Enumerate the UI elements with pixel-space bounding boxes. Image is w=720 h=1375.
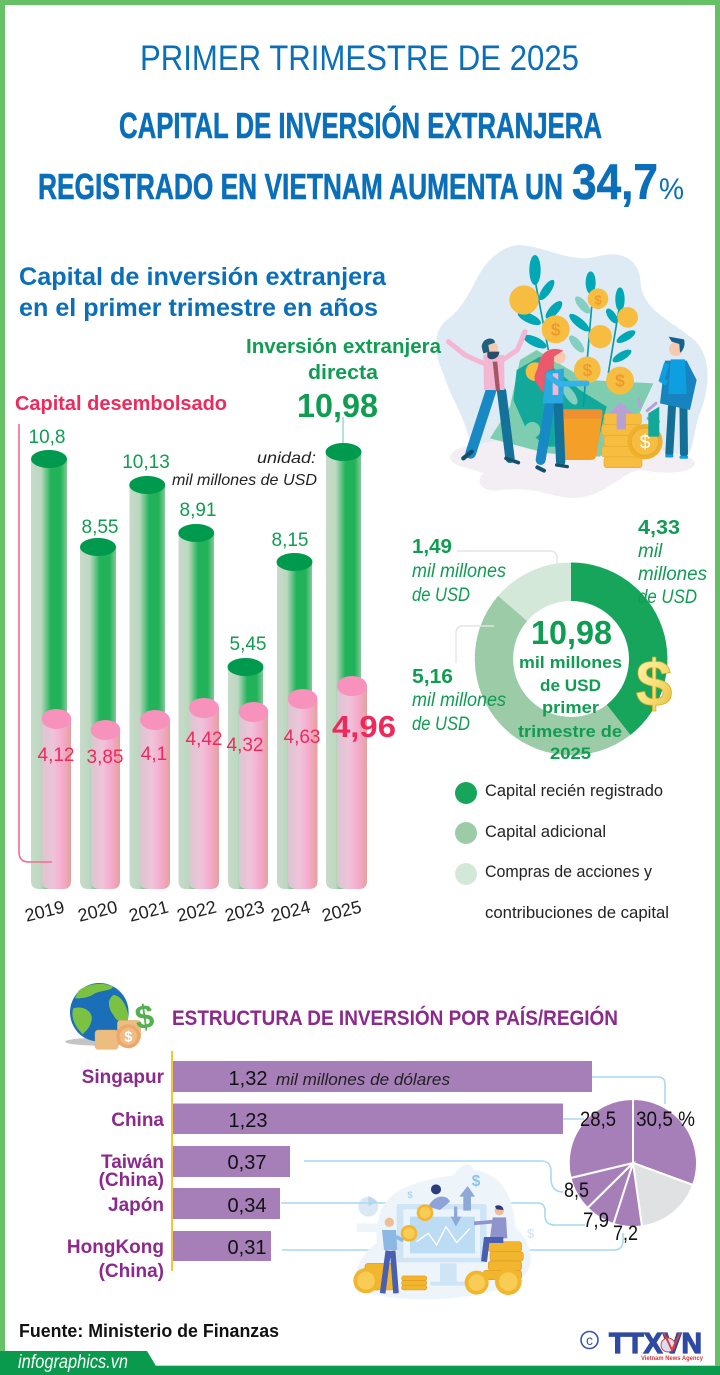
bar chart: capital by year (19, 417, 396, 926)
pie labels (564, 1108, 695, 1245)
illustration: people with money plants: $ (594, 293, 602, 308)
pie labels: 8,5 (564, 1179, 589, 1202)
illustration: investors around monitor: $ (472, 1173, 481, 1190)
donut segment: share purchases (498, 562, 571, 621)
section heading: capital by year (19, 263, 387, 322)
donut center label (518, 614, 622, 763)
pot (563, 409, 603, 460)
bar: Japan: 0,34 (228, 1195, 266, 1217)
donut center label: 2025 (550, 744, 591, 763)
green value labels: 8,15 (272, 530, 308, 551)
icon: gold dollar: $ (636, 646, 672, 720)
bar: Singapore (173, 1061, 592, 1092)
year axis labels: 2022 (175, 897, 218, 926)
illustration: people with money plants: $ (615, 371, 625, 391)
legend: Capital recién registrado (485, 781, 663, 800)
year axis labels: 2020 (76, 897, 119, 926)
title: percent sign: % (659, 173, 684, 206)
callout: 5,16: de USD (412, 714, 470, 735)
logo: TTXVN: Vietnam News Agency (641, 1355, 703, 1362)
man right (667, 395, 687, 457)
label: foreign direct investment: Inversión extranjera (246, 336, 442, 358)
footer site name: infographics.vn (18, 1352, 128, 1373)
donut center label: 10,98 (531, 614, 612, 651)
country labels: (China) (99, 1261, 164, 1282)
donut center label: de USD (540, 676, 601, 695)
bar: Hong Kong: 0,31 (228, 1237, 266, 1259)
bracket line: disbursed capital (19, 424, 52, 862)
callout: 5,16: mil millones (412, 690, 506, 711)
year axis labels: 2023 (223, 897, 266, 926)
green value labels: 10,13 (122, 452, 170, 473)
callout: 1,49 (412, 536, 506, 606)
callout: 5,16: 5,16 (412, 666, 453, 688)
pink cylinders: disbursed capital (42, 676, 367, 889)
donut segment: newly registered (571, 562, 667, 735)
green cylinders: foreign direct investment (31, 443, 362, 889)
icon: globe with coins: $ (124, 1030, 132, 1046)
unit note: mil millones de USD (172, 472, 317, 489)
chart gadget behind leader lines (357, 1196, 383, 1232)
green value labels: 5,45 (230, 634, 266, 655)
country labels: (China) (99, 1170, 164, 1191)
year axis labels: 2021 (127, 897, 170, 926)
unit note: unidad: (257, 450, 316, 467)
callout: 4,33: de USD (638, 587, 697, 608)
logo: TTXVN: TTXVN (609, 1328, 702, 1360)
pie labels: 7,9 (583, 1209, 609, 1232)
source: Fuente: Ministerio de Finanzas (19, 1321, 279, 1341)
man left (448, 332, 525, 463)
illustration: investors around monitor: $ (407, 1190, 413, 1200)
title: percentage: 34,7 (572, 154, 658, 210)
coin stack (602, 413, 642, 468)
illustration: people with money plants: $ (582, 360, 592, 380)
donut center label: mil millones (519, 653, 622, 672)
pie labels: 28,5 (580, 1108, 616, 1131)
country labels: Japón (108, 1195, 164, 1216)
unit note (172, 450, 317, 489)
pink value labels (38, 709, 396, 768)
pie labels: 7,2 (613, 1222, 638, 1245)
footer band (0, 1351, 720, 1375)
green value labels: 8,91 (180, 500, 216, 521)
man standing (385, 1218, 394, 1227)
legend: contribuciones de capital (485, 903, 669, 922)
donut center label: trimestre de (518, 722, 622, 741)
title block (38, 39, 684, 210)
bar: Japan (173, 1188, 280, 1219)
pie labels: 30,5 % (636, 1108, 695, 1131)
pink value labels: 3,85 (87, 747, 123, 768)
bar: Singapore: mil millones de dólares (276, 1070, 451, 1089)
country labels: Singapur (82, 1067, 165, 1088)
callout: 1,49: de USD (412, 585, 470, 606)
bar: Taiwan (173, 1146, 290, 1177)
title: period: PRIMER TRIMESTRE DE 2025 (140, 39, 579, 78)
section heading: capital by year: en el primer trimestre en años (19, 294, 378, 322)
country labels: Taiwán (101, 1152, 164, 1173)
legend: Compras de acciones y (485, 862, 652, 881)
callout: 4,33: 4,33 (638, 517, 680, 539)
pink value labels: 4,63 (284, 727, 320, 748)
year axis labels: 2024 (269, 897, 312, 926)
callout: 4,33 (638, 517, 707, 608)
label: foreign direct investment: directa (308, 362, 379, 384)
donut center label: primer (542, 698, 599, 717)
pie chart: share by country (564, 1099, 697, 1245)
pink value labels: 4,1 (141, 744, 167, 765)
illustration: people with money plants (436, 245, 708, 498)
icon: globe with coins: $ (133, 998, 157, 1037)
bar: Taiwan: 0,37 (228, 1152, 266, 1174)
bar: Singapore: 1,32 (229, 1068, 267, 1090)
illustration: investors around monitor (353, 1164, 535, 1299)
year axis labels: 2025 (320, 897, 363, 926)
section heading: capital by year: Capital de inversión extranjera (19, 263, 387, 291)
country labels: China (111, 1110, 164, 1131)
country labels: HongKong (67, 1237, 164, 1258)
year axis labels (23, 897, 363, 926)
illustration: people with money plants: $ (551, 319, 561, 339)
donut segment: additional capital (475, 596, 630, 755)
bar: Hong Kong (173, 1231, 271, 1261)
horizontal bar chart: investment by country (67, 1051, 592, 1282)
legend: Capital adicional (485, 822, 606, 841)
woman (537, 403, 567, 471)
callout: 4,33: millones (638, 564, 707, 585)
icon: globe with coins (65, 983, 157, 1049)
logo: TTXVN: c (586, 1332, 593, 1348)
year axis labels: 2019 (23, 897, 66, 926)
leader lines to pie (281, 1077, 665, 1250)
pink value labels: 4,96 (332, 709, 396, 744)
label: foreign direct investment (246, 336, 442, 384)
man sitting (495, 1206, 504, 1215)
bar: China (173, 1104, 563, 1134)
green value labels: 8,55 (82, 517, 118, 538)
illustration: people with money plants: $ (640, 433, 651, 454)
callout: 5,16 (412, 666, 506, 735)
pink value labels: 4,42 (186, 729, 222, 750)
bar: China: 1,23 (229, 1110, 267, 1132)
heading: structure by country: ESTRUCTURA DE INVERSIÓN POR PAÍS/REGIÓN (172, 1006, 618, 1030)
callout: 1,49: 1,49 (412, 536, 452, 558)
callout: 4,33: mil (638, 541, 663, 562)
label: disbursed capital: Capital desembolsado (15, 393, 227, 415)
pink value labels: 4,12 (38, 745, 74, 766)
donut chart: capital composition (412, 517, 707, 763)
green value labels (29, 427, 308, 655)
callout: 1,49: mil millones (412, 561, 506, 582)
illustration: investors around monitor: $ (527, 1226, 535, 1241)
pink value labels: 4,32 (227, 735, 263, 756)
legend (455, 781, 669, 922)
value: 2025 foreign direct investment: 10,98 (297, 387, 378, 424)
green value labels: 10,8 (29, 427, 65, 448)
country labels (67, 1067, 165, 1282)
